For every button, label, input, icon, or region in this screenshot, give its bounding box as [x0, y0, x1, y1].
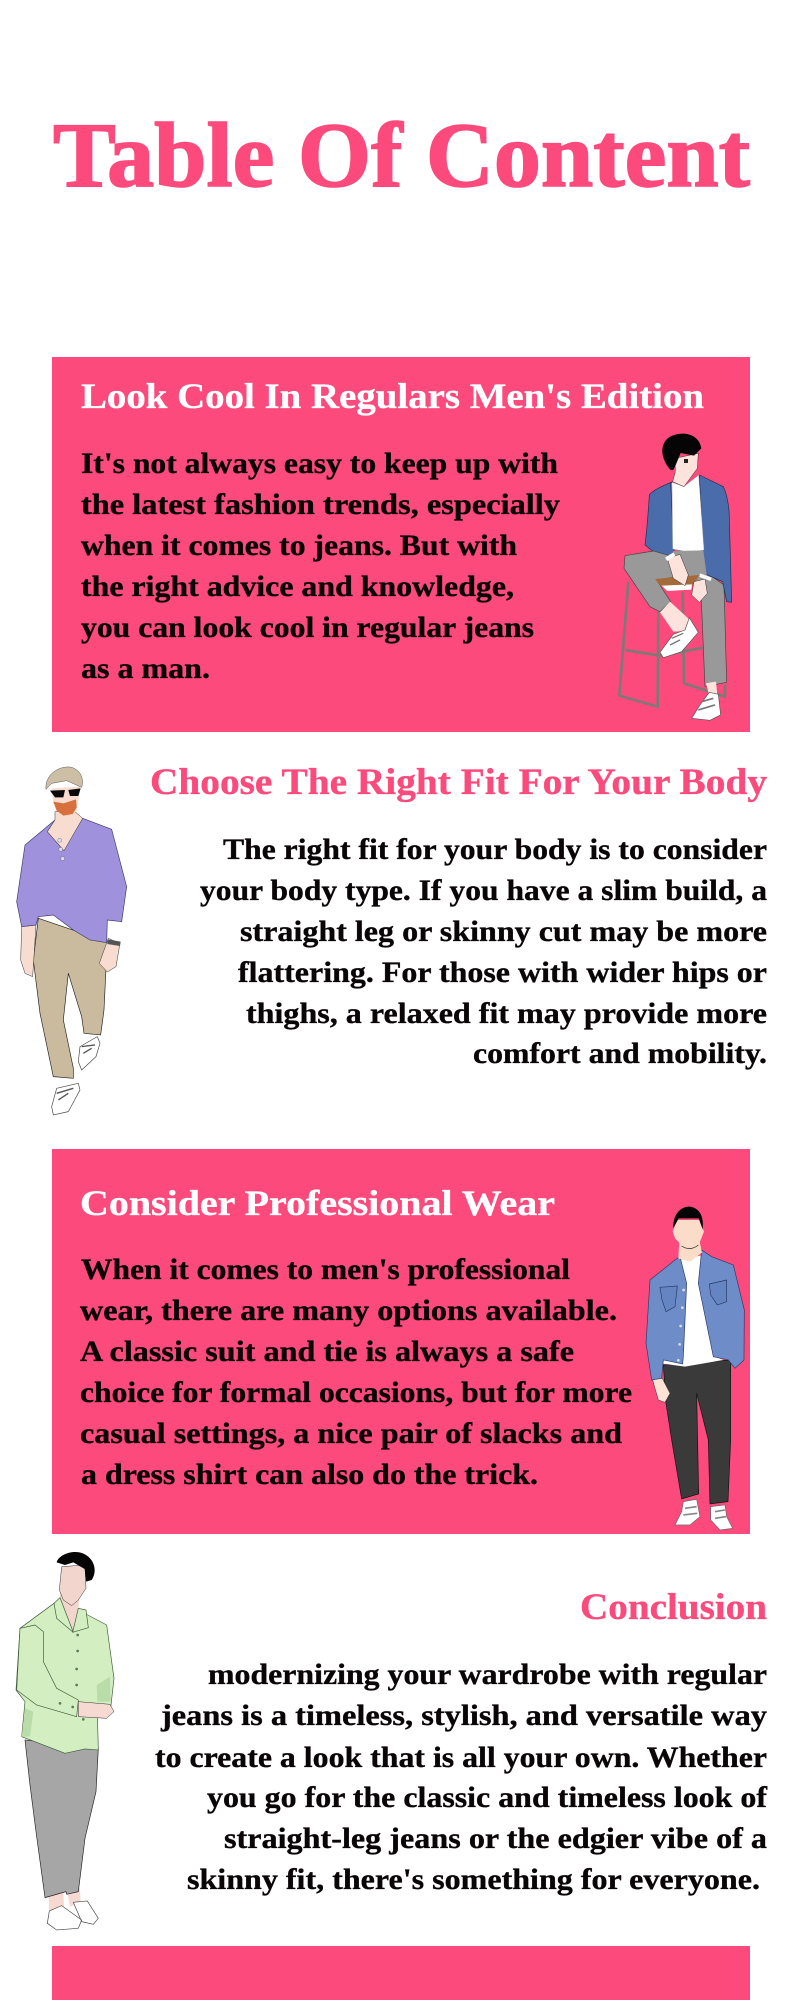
text block: conclusion: to create a look that is all your own. Whether: [155, 1741, 767, 1774]
text block: right fit: thighs, a relaxed fit may provide more: [246, 997, 767, 1030]
text block: right fit: flattering. For those with wider hips or: [238, 956, 767, 989]
icon: seated man on stool: [619, 434, 732, 720]
text block: intro: the right advice and knowledge,: [81, 570, 514, 603]
text block: professional wear: wear, there are many options available.: [80, 1294, 617, 1327]
title: Table Of Content: [53, 104, 750, 206]
text block: professional wear: casual settings, a nice pair of slacks and: [80, 1417, 622, 1450]
text block: conclusion: [155, 1658, 768, 1896]
heading: look cool: Look Cool In Regulars Men's Edition: [81, 376, 704, 416]
text block: intro: as a man.: [81, 652, 210, 685]
text block: intro: when it comes to jeans. But with: [81, 529, 517, 562]
heading: professional wear: Consider Professional Wear: [80, 1183, 555, 1223]
text block: intro: It's not always easy to keep up with: [81, 447, 558, 480]
text block: right fit: The right fit for your body is to consider: [223, 833, 767, 866]
text block: conclusion: modernizing your wardrobe with regular: [208, 1658, 767, 1691]
icon: man in green shirt: [16, 1552, 114, 1930]
text block: right fit: [200, 833, 767, 1070]
text block: conclusion: skinny fit, there's something for everyone.: [187, 1863, 760, 1896]
text block: professional wear: a dress shirt can also do the trick.: [81, 1458, 538, 1491]
text block: intro: the latest fashion trends, especially: [81, 488, 560, 521]
text block: intro: [81, 447, 560, 685]
text block: professional wear: choice for formal occasions, but for more: [80, 1376, 632, 1409]
heading: choose the right fit: Choose The Right Fit For Your Body: [150, 762, 768, 803]
text block: professional wear: A classic suit and tie is always a safe: [80, 1335, 574, 1368]
panel: bottom band: [52, 1946, 750, 2000]
text block: conclusion: you go for the classic and timeless look of: [207, 1781, 768, 1814]
text block: intro: you can look cool in regular jeans: [81, 611, 534, 644]
panel: choose the right fit: [17, 762, 768, 1115]
icon: walking man in lavender shirt: [17, 767, 127, 1115]
heading: conclusion: Conclusion: [580, 1587, 767, 1628]
panel: look cool in regulars: [52, 357, 750, 732]
icon: man in denim jacket: [646, 1207, 744, 1530]
text block: professional wear: When it comes to men's professional: [81, 1253, 570, 1286]
text block: right fit: comfort and mobility.: [473, 1037, 767, 1070]
panel: conclusion: [16, 1552, 768, 1930]
text block: right fit: your body type. If you have a slim build, a: [200, 874, 767, 907]
text block: professional wear: [80, 1253, 632, 1491]
panel: consider professional wear: [52, 1149, 750, 1534]
text block: conclusion: straight-leg jeans or the edgier vibe of a: [224, 1822, 767, 1855]
text block: conclusion: jeans is a timeless, stylish, and versatile way: [160, 1699, 767, 1732]
text block: right fit: straight leg or skinny cut may be more: [240, 915, 767, 948]
